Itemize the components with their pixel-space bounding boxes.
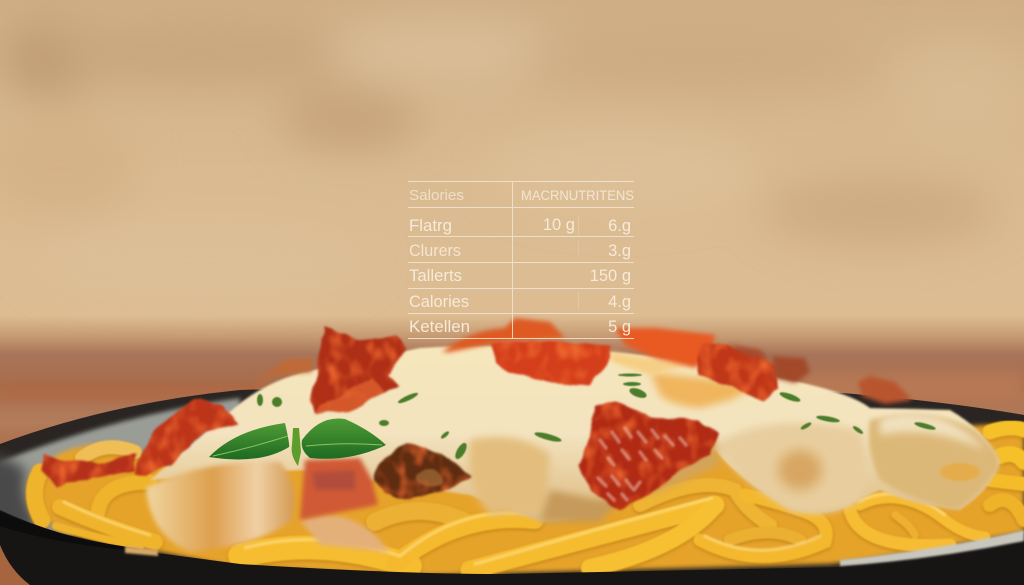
bacon: left far soft bbox=[252, 358, 312, 384]
spaghetti noodles bbox=[30, 425, 1024, 576]
table row: Ketellen: 5 g bbox=[608, 318, 631, 336]
table row: Flatrg: 6.g bbox=[608, 217, 631, 235]
crispy bacon pieces bbox=[42, 318, 912, 520]
table header: MACRNUTRITENS bbox=[521, 188, 634, 203]
bacon: lower soft bbox=[300, 458, 378, 520]
table row: Calories: Calories bbox=[409, 293, 469, 311]
table grid lines bbox=[408, 181, 634, 338]
bacon: upper right pieces bbox=[615, 328, 810, 402]
table row: Tallerts: Tallerts bbox=[409, 267, 462, 285]
table row: Flatrg bbox=[409, 216, 631, 235]
table row: Ketellen bbox=[409, 318, 631, 336]
table row: Flatrg: Flatrg bbox=[409, 217, 452, 235]
nutrition table overlay bbox=[408, 181, 634, 338]
basil: right leaf bbox=[302, 418, 386, 459]
browned crumble bbox=[375, 443, 470, 500]
basil: left leaf bbox=[209, 423, 289, 459]
table row: Flatrg: 10 g bbox=[543, 216, 575, 234]
table row: Clurers bbox=[409, 242, 631, 260]
bacon: front glossy bbox=[578, 402, 718, 510]
table row: Clurers: 3.g bbox=[608, 242, 631, 260]
creamy sauce and chicken bbox=[146, 346, 1000, 552]
plate bbox=[0, 380, 1024, 585]
herb flecks bbox=[257, 374, 936, 461]
table row: Tallerts: 150 g bbox=[590, 267, 631, 285]
basil leaves bbox=[209, 418, 386, 466]
bacon: top centre soft bbox=[442, 318, 565, 352]
table header: Salories bbox=[409, 187, 464, 204]
table row: Calories: 4.g bbox=[608, 293, 631, 311]
bacon: top left large bbox=[310, 327, 406, 414]
table row: Tallerts bbox=[409, 267, 631, 285]
table row: Calories bbox=[409, 293, 631, 311]
plate front rim bbox=[0, 510, 1024, 585]
noodle bed bbox=[30, 425, 1024, 576]
bacon: centre piece bbox=[492, 340, 610, 386]
basil: stem bbox=[292, 428, 301, 466]
table row: Ketellen: Ketellen bbox=[409, 318, 470, 336]
table header bbox=[409, 187, 634, 204]
bacon: left curled strip bbox=[42, 398, 238, 487]
table row: Clurers: Clurers bbox=[409, 242, 461, 260]
bacon: far right soft bbox=[858, 376, 912, 404]
